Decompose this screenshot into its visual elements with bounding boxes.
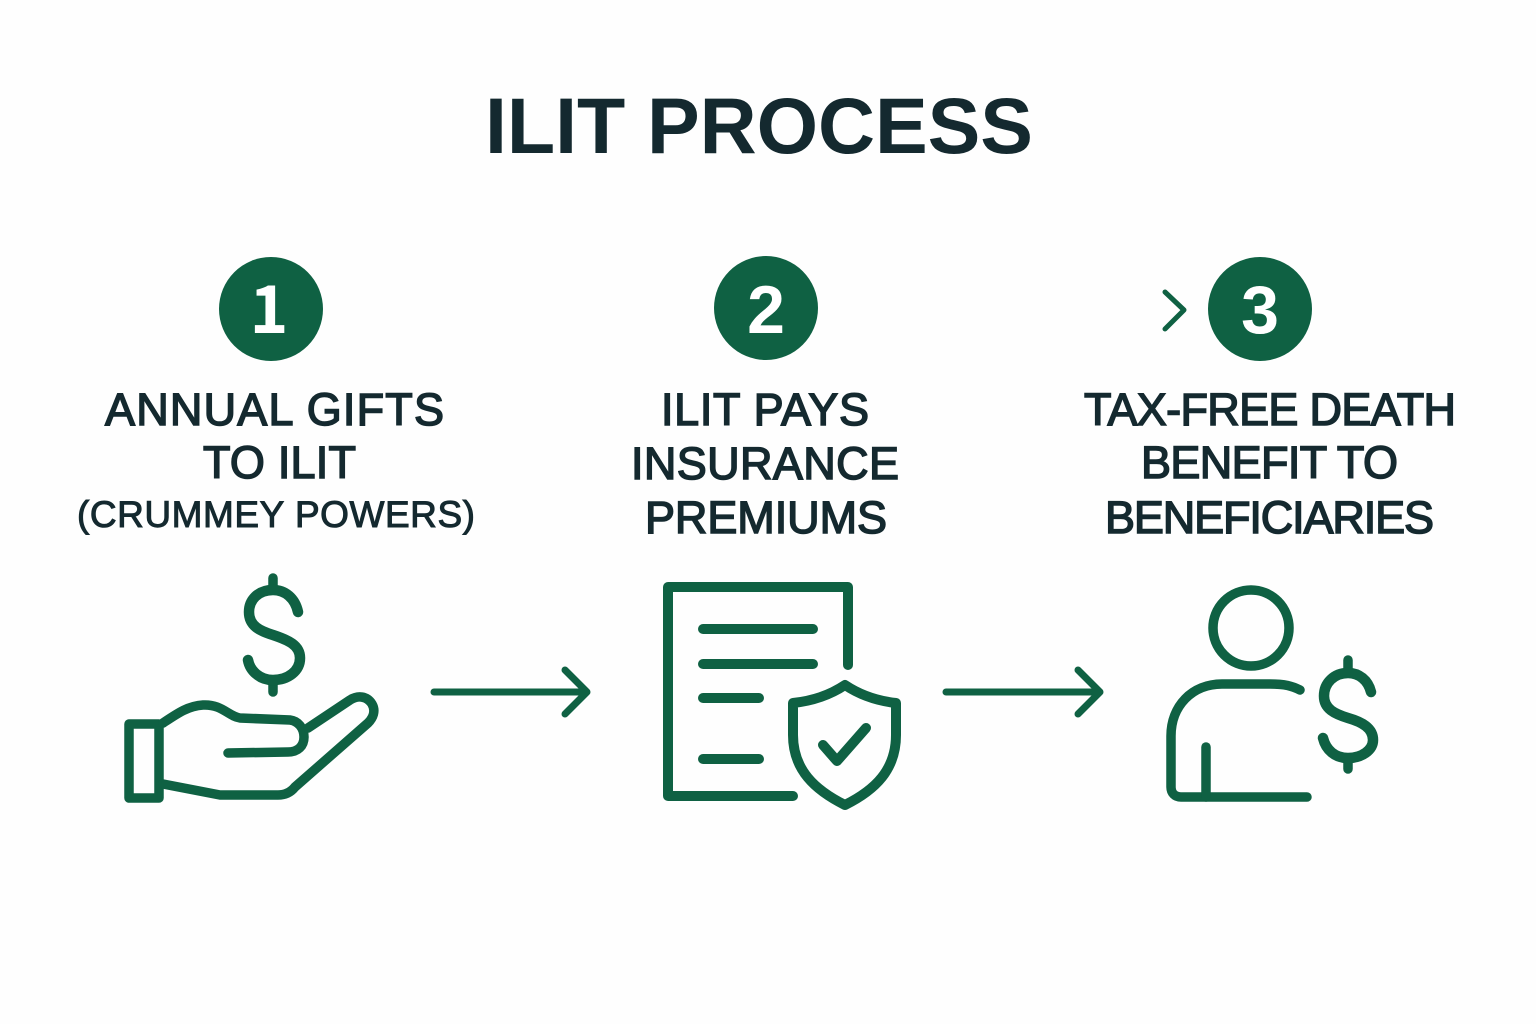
- small chevron: [1165, 292, 1184, 329]
- step 1 heading: ANNUAL GIFTS: [105, 384, 444, 435]
- step 3: [1084, 257, 1456, 797]
- number badge 2: [714, 256, 818, 360]
- step 1 heading: [77, 384, 475, 535]
- number badge 3: 3: [1241, 272, 1279, 348]
- icon: policy document with shield: [668, 587, 896, 805]
- step 1 heading: TO ILIT: [203, 437, 356, 488]
- number badge 1: 1: [250, 257, 288, 353]
- step 3 heading: BENEFIT TO: [1141, 437, 1398, 488]
- number badge 2: 2: [747, 272, 785, 348]
- step 3 heading: TAX-FREE DEATH: [1084, 384, 1456, 435]
- arrow: step 1 to step 2: [434, 670, 587, 714]
- icon: beneficiary with dollar: [1171, 590, 1373, 797]
- step 1: [77, 257, 475, 798]
- step 2 heading: INSURANCE: [631, 438, 899, 489]
- step 2 heading: PREMIUMS: [645, 492, 887, 543]
- arrow: step 2 to step 3: [946, 670, 1100, 714]
- icon: hand holding dollar: [129, 578, 374, 798]
- step 2 heading: [631, 384, 899, 543]
- title: ILIT PROCESS: [485, 81, 1033, 170]
- step 3 heading: [1084, 384, 1456, 543]
- step 2 heading: ILIT PAYS: [661, 384, 869, 435]
- step 2: [631, 256, 899, 805]
- number badge 3: [1208, 257, 1312, 361]
- step 3 heading: BENEFICIARIES: [1105, 492, 1434, 543]
- number badge 1: [219, 257, 323, 361]
- step 1 heading: (CRUMMEY POWERS): [77, 494, 475, 535]
